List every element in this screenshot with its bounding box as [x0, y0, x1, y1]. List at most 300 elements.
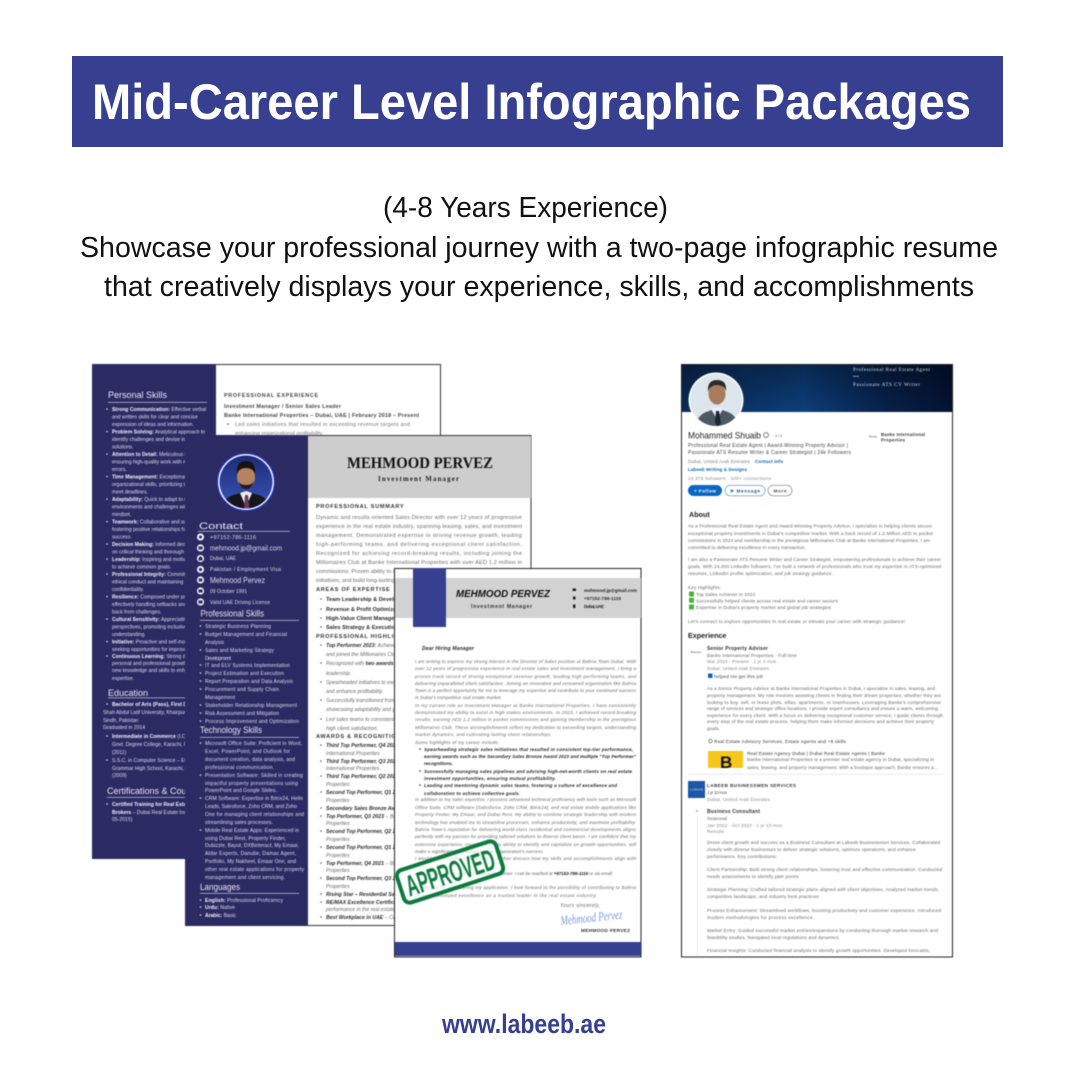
letter body: proven track record of driving exceptional revenue growth, leading high-performing teams, and — [414, 674, 636, 679]
main column: summary, expertise, highlights, awards: Properties — [326, 782, 350, 788]
sidebar: personal skills, education, certifications: Professional Integrity: Committed to — [112, 572, 198, 578]
panel: cover letter (front) — [394, 568, 641, 957]
header: name and job title: MEHMOOD PERVEZ — [347, 455, 493, 472]
main column: summary, expertise, highlights, awards: Second Top Performer, Q3 2021 — [326, 876, 404, 882]
main column: summary, expertise, highlights, awards: Third Top Performer, Q4 2023 – Banke — [326, 743, 419, 749]
experience: Labeeb: closely with diverse businesses to deliver strategic solutions, optimize operations, and enhance — [707, 847, 916, 852]
header: name and job title — [308, 436, 531, 498]
main column: summary, expertise, highlights, awards: and joined the Millionaires Club — [326, 652, 398, 658]
main column: summary, expertise, highlights, awards: Revenue & Profit Optimization — [326, 607, 407, 613]
sidebar: personal skills, education, certifications — [92, 364, 216, 859]
sidebar: personal skills, education, certifications: S.S.C. in Computer Science – Evening — [112, 758, 200, 764]
sidebar: contact and skills: Report Preparation and Data Analysis — [205, 679, 293, 685]
sidebar: personal skills, education, certifications: expertise. — [112, 676, 134, 682]
main column: summary, expertise, highlights, awards: Best Workplace in UAE – Certified — [326, 915, 409, 921]
experience: Labeeb: Strategic Planning: Crafted tailored strategic plans aligned with client objectives. Analyzed market trends, — [707, 887, 939, 892]
infographic page — [72, 56, 1003, 1034]
experience: Labeeb: needs assessments to identify pain points. — [707, 874, 800, 879]
main column: summary, expertise, highlights, awards: Sales Strategy & Execution — [326, 625, 399, 631]
experience: Labeeb: Drove client growth and success as a Business Consultant at Labeeb Businessmen Services. Collaborated — [707, 840, 940, 845]
bullets — [106, 408, 108, 805]
main column: summary, expertise, highlights, awards: Led sales teams to consistently deliver — [326, 717, 415, 723]
sidebar: personal skills, education, certifications: Shah Abdul Latif University, Khairpur, — [103, 710, 187, 716]
sidebar: personal skills, education, certifications: effectively handling setbacks and bouncing — [112, 602, 209, 608]
sidebar: personal skills, education, certifications: 05-2015) — [112, 817, 133, 823]
sidebar: personal skills, education, certifications: identify challenges and devise innovative — [112, 437, 204, 443]
professional experience text: Investment Manager / Senior Sales Leader — [224, 404, 342, 410]
experience: Labeeb: Business Consultant — [707, 809, 760, 815]
letter body: Bahria Town's reputation for delivering world-class residential and commercial developments aligns — [415, 827, 637, 832]
sidebar: personal skills, education, certifications: Strong Communication: Effective verbal — [112, 407, 206, 413]
subtitle text block: that creatively displays your experience, skills, and accomplishments — [104, 271, 974, 303]
action buttons: + Follow — [694, 488, 716, 494]
main column: summary, expertise, highlights, awards: Second Top Performer, Q1 2023 — [326, 790, 404, 796]
about section: Expertise in Dubai's property market and global job strategies — [696, 605, 832, 610]
main column: summary, expertise, highlights, awards: Third Top Performer, Q3 2023 – Banke — [326, 759, 419, 765]
stamp: approved: APPROVED — [402, 844, 499, 903]
experience: Banke: range of services and strategic office locations, I provide expert consultancy and ensure a warm, welcoming — [707, 706, 938, 711]
main column: summary, expertise, highlights, awards: Properties — [326, 853, 350, 859]
main column: summary, expertise, highlights, awards: Recognized for achieving record-breaking results, including joining the — [316, 551, 522, 557]
header: name and job title: Investment Manager — [378, 476, 459, 483]
letter body: Some highlights of my career include: — [415, 740, 500, 745]
experience: Labeeb: Remote — [707, 829, 724, 834]
sidebar: personal skills, education, certifications: Problem Solving: Analytical approach to — [112, 430, 205, 436]
sidebar: personal skills, education, certifications: expression of ideas and information. — [112, 422, 194, 428]
letter body: your goals and vision at your earliest convenience. I can be reached at +97152-786-1116 or via email: — [414, 871, 614, 876]
sidebar: personal skills, education, certifications: Grammar High School, Karachi, Pakistan — [112, 766, 205, 772]
letter body: make a significant contribution to your organization's success. — [415, 849, 544, 854]
about section: commissions in 2023 and membership in the prestigious Millionaires Club at Banke International Properties, I am — [688, 538, 930, 543]
letter body: In my current role as Investment Manager at Banke International Properties, I have consistently — [415, 703, 637, 708]
contact icons — [197, 533, 204, 606]
subtitle text block: Showcase your professional journey with a two-page infographic resume — [80, 232, 998, 264]
profile banner — [682, 365, 952, 412]
about section: exceptional property investments in Dubai's competitive market. With a track record of 1.2 Million AED in pocket — [688, 531, 934, 536]
main column: summary, expertise, highlights, awards: RE/MAX Excellence Certificate — [326, 900, 401, 906]
sidebar: personal skills, education, certifications: on critical thinking and thorough analysis — [112, 550, 204, 556]
footer website: www.labeeb.ae — [441, 1009, 606, 1039]
main column: summary, expertise, highlights, awards: High-Value Client Management — [326, 616, 408, 622]
media thumbnail — [708, 751, 743, 772]
sidebar: contact and skills: Dubizzle, Bayut, DXBinteract, My Emaar, — [205, 843, 299, 849]
experience: Banke: every step of the real estate process, helping them make informed decisions and achieve their property — [707, 719, 935, 724]
sidebar: personal skills, education, certifications: Resilience: Composed under pressure, — [112, 594, 202, 600]
sidebar: personal skills, education, certifications: fostering positive relationships for team — [112, 527, 200, 533]
sidebar: personal skills, education, certifications: ensuring high-quality work with minimal — [112, 460, 201, 466]
sidebar: contact and skills: Risk Assessment and Mitigation — [205, 711, 279, 717]
about section: I am also a Passionate ATS Resume Writer and Career Strategist, empowering professionals to achieve their career — [688, 557, 941, 562]
sidebar: personal skills, education, certifications: environments and challenges with a positive — [112, 504, 212, 510]
sidebar: contact and skills: Arabic: Basic — [205, 913, 236, 919]
sidebar: contact and skills: Contact — [199, 521, 244, 531]
contact details: +97152-786-1116 — [584, 596, 621, 601]
experience: Banke: Banke International Properties · Full-time — [707, 653, 797, 658]
sidebar: personal skills, education, certifications: success. — [112, 534, 132, 540]
sidebar: contact and skills: Sales and Marketing Strategy — [205, 648, 274, 654]
about section: committed to delivering excellence in every transaction. — [688, 545, 806, 550]
main column: summary, expertise, highlights, awards: Second Top Performer, Q1 2022 — [326, 845, 404, 851]
sidebar: contact and skills: Stakeholder Relationship Management — [205, 703, 298, 709]
about section: Successfully helped clients across real estate and career sectors — [696, 598, 839, 604]
sidebar: personal skills, education, certifications: new knowledge and skills to enhance — [112, 668, 196, 674]
name and headline: Mohammed Shuaib — [688, 430, 761, 442]
experience: Labeeb: competitive landscape, and industry best practices. — [707, 894, 820, 899]
sidebar: personal skills, education, certifications: Leadership: Inspiring and motivating others — [112, 557, 212, 563]
sidebar: personal skills, education, certifications: Attention to Detail: Meticulous in — [112, 452, 189, 458]
sidebar: contact and skills: Professional Skills — [200, 608, 264, 618]
main column: summary, expertise, highlights, awards: International Properties — [326, 766, 380, 772]
sidebar: contact and skills: PowerPoint and Google Slides. — [205, 788, 277, 794]
letterhead band: MEHMOOD PERVEZ — [456, 589, 551, 600]
sidebar: contact and skills: Technology Skills — [200, 725, 262, 735]
sidebar: contact and skills: Procurement and Supply Chain — [205, 687, 279, 693]
main column: summary, expertise, highlights, awards: Dynamic and results-oriented Sales Director with over 12 years of progressive — [316, 515, 522, 521]
sidebar: contact and skills: streamlining sales processes. — [205, 820, 273, 826]
current company: Banke International — [881, 432, 925, 437]
footer band — [395, 942, 641, 956]
sidebar: personal skills, education, certifications: Personal Skills — [108, 390, 168, 400]
professional experience text: Led sales initiatives that resulted in exceeding revenue targets and — [235, 422, 410, 428]
about section: As a Professional Real Estate Agent and Award-Winning Property Advisor, I specialize in helping clients secure — [688, 524, 932, 528]
professional experience text — [224, 393, 419, 437]
letter body: Millionaires Club. These accomplishments reflect my dedication to exceeding targets, understanding — [415, 725, 636, 730]
letter body: I would welcome the opportunity to further discuss how my skills and accomplishments align with — [415, 856, 636, 861]
signature: Mehmood Pervez — [559, 907, 623, 928]
sidebar: personal skills, education, certifications: perspectives, promoting inclusive — [112, 624, 187, 630]
sidebar: contact and skills: mehmood.jp@gmail.com — [210, 544, 282, 552]
sidebar: contact and skills: Development — [205, 656, 232, 662]
name and headline: Contact info — [755, 459, 783, 464]
sidebar: contact and skills: document creation, data analysis, and — [205, 757, 295, 763]
main column: summary, expertise, highlights, awards — [316, 504, 522, 921]
about section: Top Sales Achiever in 2023 — [696, 592, 755, 597]
sidebar: contact and skills: using Dubai Rest, Property Finder, — [205, 836, 286, 842]
sidebar: contact and skills: Presentation Software: Skilled in creating — [205, 773, 303, 779]
main column: summary, expertise, highlights, awards: management. Demonstrated expertise in driving revenue growth, leading — [316, 533, 522, 539]
letter body: perfectly with my passion for providing tailored solutions to diverse client bases. I am confident that my — [414, 834, 637, 839]
main column: summary, expertise, highlights, awards: Properties — [326, 884, 350, 890]
profile banner: Passionate ATS CV Writer — [853, 382, 920, 388]
sidebar: personal skills, education, certifications: personal and professional growth, seeking — [112, 661, 208, 667]
letter body: Leading and mentoring dynamic sales teams, fostering a culture of excellence and — [424, 783, 617, 788]
sidebar: personal skills, education, certifications: Cultural Sensitivity: Appreciating diverse — [112, 617, 207, 623]
experience: Banke: Banke International Properties is a premier real estate agency in Dubai, specializing in — [747, 757, 934, 762]
current company — [869, 432, 925, 442]
sidebar: personal skills, education, certifications: back from challenges. — [112, 610, 162, 616]
sidebar: contact and skills: Dubai, UAE — [210, 556, 237, 562]
sidebar: contact and skills: Pakistan / Employment Visa — [210, 567, 281, 573]
sidebar: contact and skills: Aldar Experts, Danube, Damac Agent, — [205, 851, 296, 857]
sidebar: personal skills, education, certifications: Brokers – Dubai Real Estate Institute — [112, 810, 197, 816]
sidebar: contact and skills: Microsoft Office Suite: Proficient in Word, — [205, 741, 302, 747]
letter body: I am writing to express my strong interest in the Director of Sales position at Bahria Town Dubai. With — [415, 659, 636, 664]
portrait photo — [218, 454, 274, 512]
letter body: Yours sincerely, — [560, 903, 600, 909]
bullets — [320, 598, 322, 918]
main column: summary, expertise, highlights, awards: Second Top Performer, Q2 2022 — [326, 829, 404, 835]
name and headline: Labeeb Writing & Designs — [688, 467, 747, 472]
sidebar: personal skills, education, certifications: and written skills for clear and concise — [112, 414, 198, 420]
main column: summary, expertise, highlights, awards: PROFESSIONAL SUMMARY — [316, 504, 404, 510]
main column: summary, expertise, highlights, awards: Recognized with two awards for sales — [326, 661, 415, 667]
main column: summary, expertise, highlights, awards: International Properties — [326, 751, 380, 757]
main column: summary, expertise, highlights, awards: high client satisfaction. — [326, 726, 378, 732]
media thumbnail: B — [720, 753, 732, 772]
about section: Let's connect to explore opportunities in real estate or elevate your career with strategic guidance! — [688, 619, 905, 624]
sidebar: personal skills, education, certifications: Sindh, Pakistan — [103, 718, 139, 724]
sidebar: personal skills, education, certifications: understanding. — [112, 632, 146, 638]
title banner — [72, 56, 1003, 147]
sidebar: contact and skills: Budget Management and Financial — [205, 632, 287, 638]
sidebar: personal skills, education, certifications: Continuous Learning: Strong drive for — [112, 654, 201, 660]
main column: summary, expertise, highlights, awards: commissions. Proven ability to spearhead sales — [316, 569, 434, 575]
experience: Banke: helped me get this job — [714, 674, 763, 679]
letter body: Thank you for considering my application. I look forward to the possibility of contributing to Bahria — [415, 885, 636, 890]
sidebar: personal skills, education, certifications: seeking opportunities for improvement. — [112, 647, 200, 653]
letter body: earning awards such as the Secondary Sales Bronze Award 2023 and multiple "Top Performer" — [424, 754, 637, 759]
sidebar: personal skills, education, certifications: Intermediate in Commerce (I.Com) – — [112, 734, 199, 740]
sidebar: contact and skills: Project Estimation and Execution — [205, 671, 284, 677]
sidebar: contact and skills: management and client servicing. — [205, 875, 285, 881]
main column: summary, expertise, highlights, awards: PROFESSIONAL HIGHLIGHTS — [316, 634, 412, 640]
letter body: In addition to my sales expertise, I possess advanced technical proficiency with tools such as Microsoft — [415, 797, 637, 802]
experience: Banke: Banke — [691, 650, 701, 654]
sidebar: contact and skills: +97152-786-1116 — [210, 535, 256, 541]
about section: About — [689, 510, 710, 519]
action buttons: ➤ Message — [730, 488, 760, 494]
letterhead band — [395, 568, 641, 627]
main column: summary, expertise, highlights, awards: Team Leadership & Development — [326, 597, 414, 603]
main column: summary, expertise, highlights, awards: Third Top Performer, Q2 2023 – Banke — [326, 774, 419, 780]
panel: resume page one (middle) — [185, 435, 531, 926]
sidebar: contact and skills: Strategic Business Planning — [205, 624, 271, 630]
sidebar: contact and skills: CRM Software: Expertise in Bitrix24, Hello — [205, 796, 303, 802]
current company: Banke — [869, 434, 878, 438]
main column: summary, expertise, highlights, awards: performance in the real estate — [325, 907, 395, 913]
main column: summary, expertise, highlights, awards: Top Performer, Q3 2023 – Banke — [326, 814, 405, 820]
letter body: Town's continued excellence as a trusted leader in the real estate industry. — [415, 893, 597, 898]
letter body: collaboration to achieve collective goals. — [424, 791, 520, 796]
main column: summary, expertise, highlights, awards: Properties — [326, 868, 350, 874]
signature — [559, 907, 630, 934]
letter body: investment opportunities, ensuring mutual profitability. — [424, 776, 556, 781]
main column: summary, expertise, highlights, awards: leadership. — [326, 671, 351, 677]
sidebar: personal skills, education, certifications: to achieve common goals. — [112, 564, 171, 570]
experience: Labeeb: LABEEB — [690, 788, 703, 792]
letter body: over 12 years of progressive experience in real estate sales and investment management, I bring a — [415, 666, 636, 671]
name and headline: 24,378 followers · 500+ connections — [688, 476, 772, 481]
main column: summary, expertise, highlights, awards: Spearheaded initiatives to exceed targets — [326, 680, 422, 686]
sidebar: contact and skills: Mobile Real Estate Apps: Experienced in — [205, 828, 299, 834]
about section — [688, 510, 941, 624]
sidebar: contact and skills: Urdu: Native — [205, 905, 235, 911]
sidebar: personal skills, education, certifications: Time Management: Exceptional — [112, 474, 186, 480]
sidebar: personal skills, education, certifications: ethical conduct and maintaining — [112, 580, 184, 586]
professional experience text: Banke International Properties – Dubai, UAE | February 2018 – Present — [224, 413, 419, 419]
professional experience text: enhancing organizational profitability. — [235, 431, 323, 437]
contact details: mehmood.jp@gmail.com — [584, 588, 637, 593]
contact details: Dubai, UAE — [584, 604, 604, 609]
letter body: recognitions. — [424, 761, 453, 766]
sidebar: contact and skills: other real estate applications for property — [205, 867, 304, 873]
about section: goals. With 24,000 LinkedIn followers, I've built a network of professionals who trust my expertise in ATS-optimized — [688, 564, 941, 569]
letter body: Town is a perfect opportunity for me to leverage my expertise and contribute to your continued success — [415, 688, 637, 693]
sidebar: personal skills, education, certifications: solutions. — [112, 444, 134, 450]
letter body: Office Suite, CRM software (Salesforce, Zoho CRM, Bitrix24), and real estate mobile applications like — [415, 805, 636, 810]
sidebar: personal skills, education, certifications: (2011) — [112, 750, 127, 756]
sidebar: contact and skills: One for managing client relationships and — [205, 812, 304, 818]
sidebar: personal skills, education, certifications: (2009) — [112, 773, 127, 779]
experience: Banke: Real Estate Advisory Services, Estate Agents and +8 skills — [714, 739, 847, 744]
main column: summary, expertise, highlights, awards: experience in the real estate industry, spanning leasing, sales, and investment — [316, 524, 522, 530]
main column: summary, expertise, highlights, awards: showcasing adaptability and growth — [326, 707, 408, 713]
sidebar: contact and skills: impactful property presentations using — [205, 781, 298, 787]
name and headline: Passionate ATS Resume Writer & Career Strategist | 24k Followers — [688, 450, 852, 456]
sidebar: personal skills, education, certifications: Teamwork: Collaborative and supportive, — [112, 520, 206, 526]
main column: summary, expertise, highlights, awards: initiatives, and build long-lasting client relations — [316, 578, 432, 584]
experience: Labeeb: LABEEB BUSINESSMEN SERVICES — [707, 783, 796, 788]
about section: resumes, LinkedIn profile optimization, and job strategy guidance. — [688, 571, 833, 576]
profile photo — [688, 372, 744, 428]
main column: summary, expertise, highlights, awards: high-performing teams, and delivering exceptional client satisfaction. — [316, 542, 522, 548]
panel: resume page two (back) — [92, 364, 440, 859]
sidebar: personal skills, education, certifications: Initiative: Proactive and self-motivated, — [112, 640, 201, 646]
action buttons — [688, 485, 792, 496]
main column: summary, expertise, highlights, awards: Rising Star – Residential Sales — [326, 892, 402, 898]
main column: summary, expertise, highlights, awards: AWARDS & RECOGNITION — [316, 734, 401, 740]
sidebar: contact and skills: Process Improvement and Optimization — [205, 719, 299, 725]
main column: summary, expertise, highlights, awards: Properties — [326, 821, 350, 827]
sidebar: personal skills, education, certifications: Govt. Degree College, Karachi, Pakistan — [112, 742, 204, 748]
experience: Banke: goals. — [707, 726, 720, 731]
experience: Banke: Dubai, United Arab Emirates — [707, 666, 770, 671]
sidebar: personal skills, education, certifications: organizational skills, prioritizing tasks to — [112, 482, 201, 488]
experience: Banke: sales, leasing, and property management. With a boutique approach, Banke ensures a... — [747, 765, 938, 770]
letter body: technology has enabled me to streamline processes, enhance productivity, and maximize profitability. — [415, 820, 636, 825]
sidebar: contact and skills: 09 October 1991 — [210, 589, 247, 595]
main column: summary, expertise, highlights, awards: Top Performer, Q4 2021 – Banke — [326, 861, 405, 867]
letter body — [414, 646, 637, 909]
experience: Labeeb: performance. Key contributions: — [707, 854, 777, 859]
letter body: Successfully managing sales pipelines and advising high-net-worth clients on real estate — [424, 769, 632, 774]
title banner: Mid-Career Level Infographic Packages — [92, 74, 971, 130]
experience: Labeeb — [688, 781, 942, 956]
experience: Banke: looking to buy, sell, or lease plots, villas, apartments, or townhouses. Leveraging Banke's comprehensive — [707, 700, 941, 705]
sidebar: contact and skills — [185, 435, 308, 926]
letter body: in Dubai's competitive real estate market. — [415, 695, 502, 700]
experience: Labeeb: Dubai, United Arab Emirates — [707, 797, 771, 802]
sidebar: personal skills, education, certifications: mindset. — [112, 512, 131, 518]
stamp: approved — [395, 840, 505, 905]
experience: Banke — [688, 631, 943, 772]
name and headline: Dubai, United Arab Emirates · — [688, 459, 753, 464]
main column: summary, expertise, highlights, awards: Top Performer 2023: Achieved AED 1.2 million — [326, 643, 436, 649]
sidebar: contact and skills: Excel, PowerPoint, and Outlook for — [205, 749, 290, 755]
sidebar: personal skills, education, certifications: meet deadlines. — [112, 490, 148, 496]
main column: summary, expertise, highlights, awards: and enhance profitability. — [326, 689, 383, 695]
sidebar: contact and skills: IT and ELV Systems Implementation — [205, 663, 290, 669]
name and headline: · 3rd — [771, 434, 782, 438]
letter body: Spearheading strategic sales initiatives that resulted in consistent top-tier performance, — [424, 747, 633, 752]
sidebar: contact and skills: Mehmood Pervez — [210, 576, 265, 585]
letter body: Property Finder, My Emaar, and Dubai Rest. My ability to combine strategic leadership with modern — [415, 812, 636, 817]
experience: Labeeb: Jan 2022 - Oct 2023 · 1 yr 10 mos — [707, 823, 783, 828]
sidebar: contact and skills: Languages — [200, 882, 240, 892]
experience: Banke: experience for every client. With a focus on delivering exceptional customer service, I guide clients through — [707, 713, 943, 718]
current company: Properties — [881, 438, 906, 442]
signature: MEHMOOD PERVEZ — [581, 928, 630, 934]
letter body: extensive experience, coupled with my ability to identify and capitalize on growth opportunities, will — [415, 842, 637, 847]
experience: Banke: Real Estate Agency Dubai | Dubai Real Estate Agents | Banke — [747, 751, 885, 756]
name and headline — [688, 430, 852, 481]
letter body: Dear Hiring Manager — [422, 646, 475, 652]
letter body: delivering unparalleled client satisfaction. Joining an innovative and renowned organization like Bahria — [415, 681, 636, 686]
sidebar: contact and skills: English: Professional Proficiency — [205, 898, 283, 904]
sidebar: contact and skills: Leads, Salesforce, Zoho CRM, and Zoho — [205, 804, 297, 810]
sidebar: personal skills, education, certifications: Education — [108, 688, 148, 698]
main column: summary, expertise, highlights, awards: Successfully transitioned from leasing, — [326, 698, 414, 704]
subtitle text block: (4-8 Years Experience) — [383, 192, 668, 224]
experience: Labeeb: Process Enhancement: Streamlined workflows, boosting productivity and customer experience. Introduced — [707, 908, 941, 913]
sidebar: personal skills, education, certifications: Bachelor of Arts (Pass), First Division — [112, 702, 203, 708]
experience: Labeeb: Market Entry: Guided successful market entries/expansions by conducting thorough market research and — [707, 928, 938, 933]
experience: Banke: Experience — [688, 631, 726, 640]
sidebar: personal skills, education, certifications: confidentiality. — [112, 587, 144, 593]
sidebar: personal skills, education, certifications: Certifications & Courses — [107, 786, 204, 796]
profile banner: Professional Real Estate Agent — [853, 366, 931, 373]
letter body: results, earning AED 1.2 million in pocket commissions and gaining membership in the prestigious — [415, 717, 637, 722]
name and headline: Professional Real Estate Agent | Award-Winning Property Advisor | — [688, 443, 848, 449]
experience: Labeeb: Client Partnership: Built strong client relationships, fostering trust and effective communication. Conducted — [707, 867, 942, 872]
experience: Banke: Senior Property Adviser — [707, 646, 768, 652]
main column: summary, expertise, highlights, awards: Properties — [326, 837, 350, 843]
main column: summary, expertise, highlights, awards: Secondary Sales Bronze Award 2023 — [326, 806, 417, 812]
letterhead band: Investment Manager — [471, 604, 532, 610]
sidebar: personal skills, education, certifications: Certified Training for Real Estate — [112, 802, 191, 808]
sidebar: personal skills, education, certifications: Graduated in 2014 — [103, 725, 145, 731]
sidebar: personal skills, education, certifications: errors. — [112, 467, 127, 473]
bullets — [200, 625, 201, 916]
sidebar: personal skills, education, certifications: Decision Making: Informed decisions based — [112, 542, 214, 548]
about section: Key Highlights: — [688, 585, 721, 590]
letter body: market dynamics, and cultivating lasting client relationships. — [415, 732, 552, 737]
experience: Banke: property management. My role involves assisting clients in finding their dream properties, whether they are — [707, 693, 941, 698]
sidebar: contact and skills: Valid UAE Driving License — [210, 600, 270, 606]
subtitle text block — [80, 192, 998, 303]
letter body: demonstrated my ability to excel in high-stakes environments. In 2023, I achieved record-breaking — [415, 710, 636, 715]
sidebar: contact and skills: professional communication. — [205, 765, 274, 771]
experience: Banke: Mar 2024 - Present · 1 yr 2 mos — [707, 659, 777, 664]
action buttons: More — [774, 488, 787, 494]
experience: Labeeb: Financial Insights: Conducted financial analysis to identify growth opportunities. Developed forecasts, — [707, 948, 930, 953]
sidebar: contact and skills: Analysis — [205, 640, 224, 646]
experience: Banke: As a Senior Property Advisor at Banke International Properties in Dubai, I specialize in sales, leasing, and — [707, 686, 935, 691]
sidebar: contact and skills: Management — [205, 695, 236, 701]
main column: summary, expertise, highlights, awards: AREAS OF EXPERTISE — [316, 587, 390, 593]
experience: Labeeb: 1 yr 10 mos — [707, 790, 728, 795]
main column: summary, expertise, highlights, awards: Properties — [326, 798, 350, 804]
sidebar: personal skills, education, certifications: Adaptability: Quick to adapt to new — [112, 497, 194, 503]
experience: Labeeb: modern methodologies for process excellence. — [707, 915, 814, 920]
professional experience text: PROFESSIONAL EXPERIENCE — [224, 393, 319, 399]
experience: Labeeb: Seasonal — [707, 816, 727, 821]
sidebar: contact and skills: Portfolio, My Nakheel, Emaar One, and — [205, 859, 296, 865]
contact details — [572, 588, 637, 609]
experience: Labeeb: feasibility studies. Navigated local regulations and dynamics. — [707, 935, 840, 940]
panel: LinkedIn profile — [681, 364, 953, 958]
main column: summary, expertise, highlights, awards: Millionaires Club at Banke International Properties with over AED 1.2 million in — [316, 560, 522, 566]
